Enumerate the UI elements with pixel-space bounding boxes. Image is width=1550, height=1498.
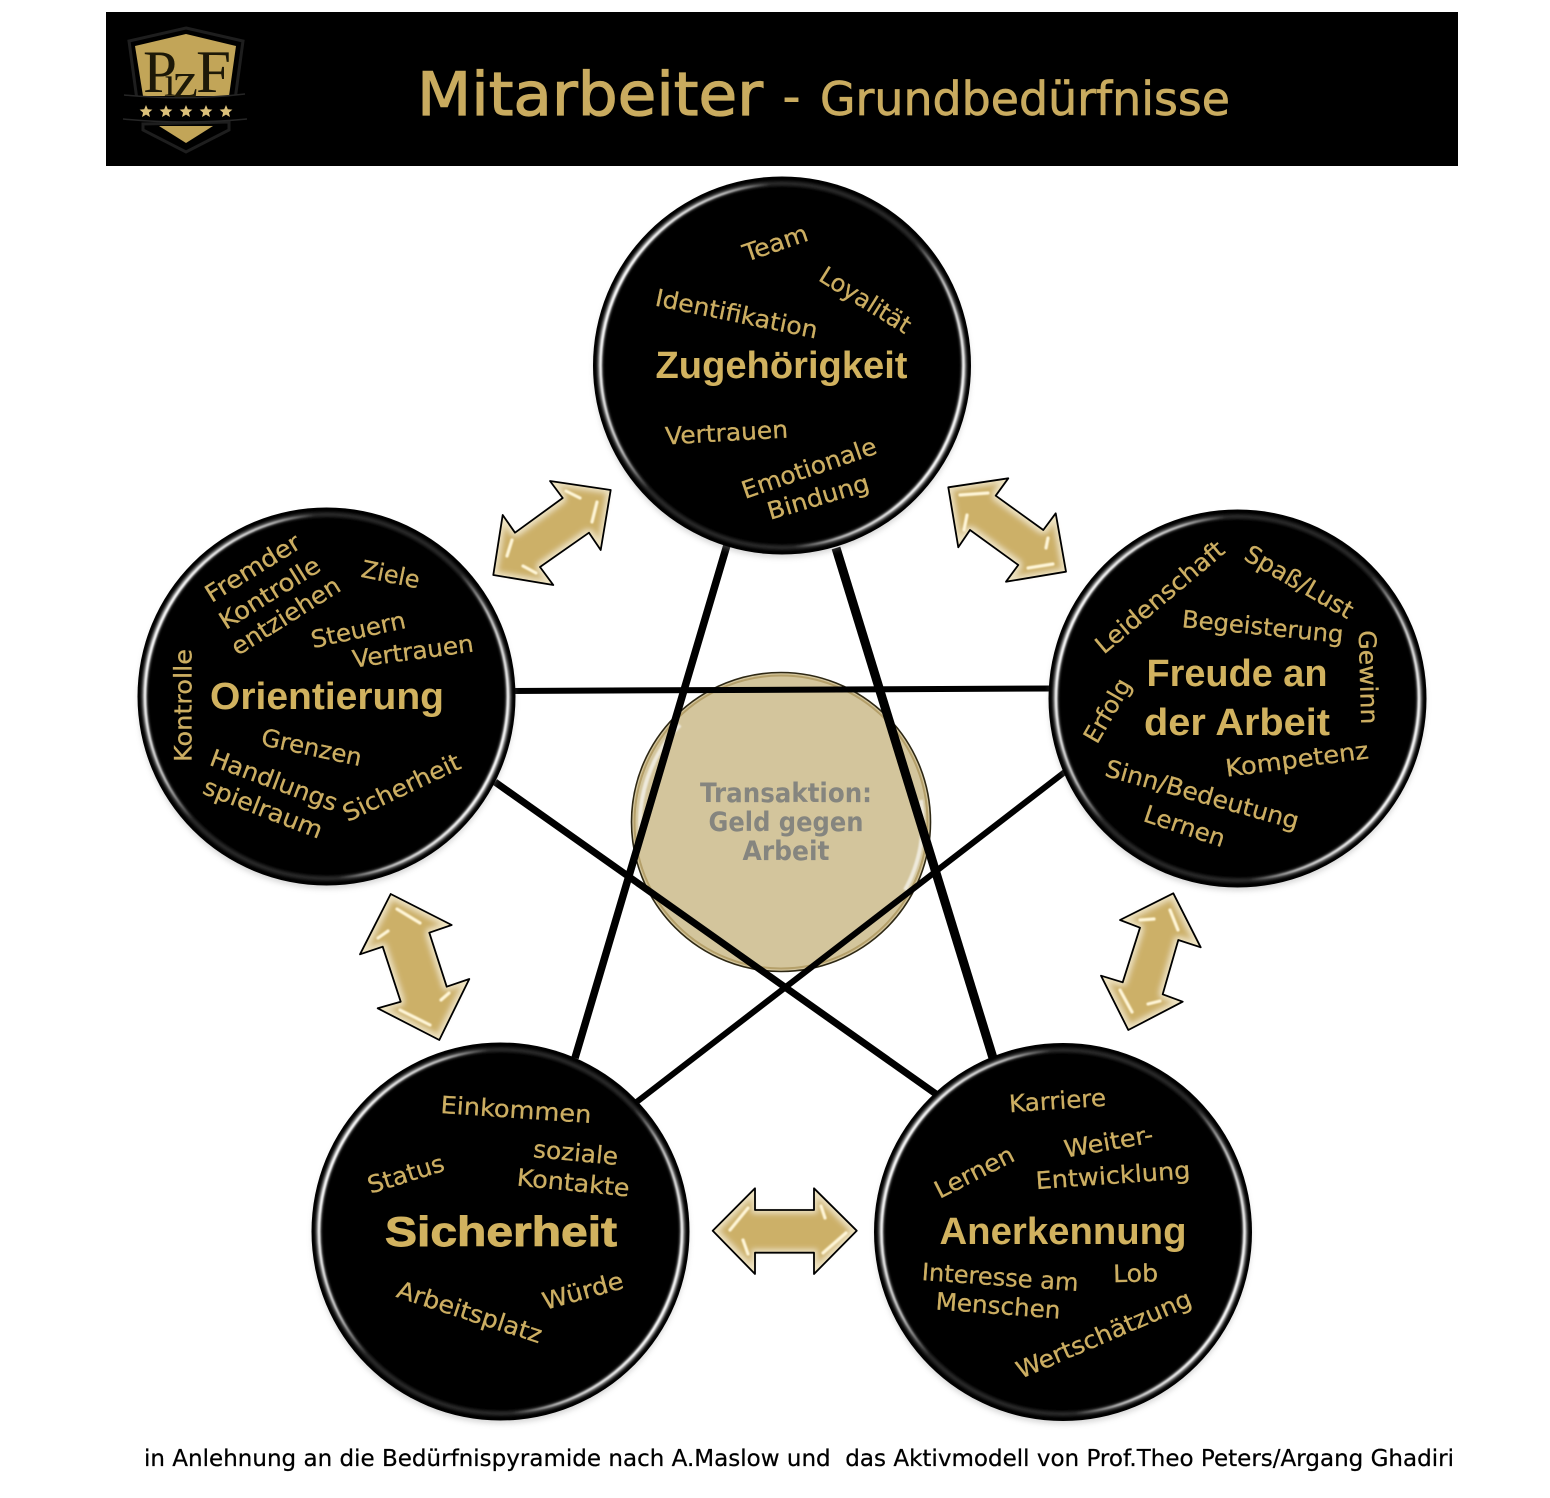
word: Entwicklung: Entwicklung: [1035, 1156, 1191, 1195]
word: Arbeitsplatz: Arbeitsplatz: [393, 1276, 546, 1349]
word: Wertschätzung: Wertschätzung: [1012, 1285, 1196, 1385]
pentagram connecting lines: [495, 545, 1068, 1104]
word: Erfolg: Erfolg: [1078, 673, 1137, 748]
word: Identifikation: Identifikation: [653, 284, 820, 344]
word: Vertrauen: Vertrauen: [664, 415, 789, 451]
word: Interesse am: Interesse am: [921, 1258, 1080, 1297]
word: Lob: Lob: [1113, 1259, 1158, 1288]
word: Vertrauen: Vertrauen: [351, 630, 475, 674]
panel: Sicherheit: [312, 1042, 690, 1424]
word: Lernen: Lernen: [930, 1140, 1019, 1204]
word: Begeisterung: Begeisterung: [1181, 605, 1345, 649]
word: Ziele: Ziele: [359, 555, 422, 594]
word: Kontrolle vertical: Kontrolle: [170, 649, 198, 762]
word: spielraum: spielraum: [199, 773, 327, 844]
arrow: Orientierung to Sicherheit: [360, 894, 469, 1040]
word: Kontakte: Kontakte: [516, 1164, 631, 1202]
word: entziehen: entziehen: [226, 571, 346, 661]
word: Team: Team: [738, 219, 812, 268]
center label: [700, 778, 872, 867]
word: Emotionale: Emotionale: [738, 432, 880, 505]
center label: Geld gegen: [708, 807, 864, 838]
title: [417, 60, 1230, 130]
icon: PzF shield logo: i: [164, 60, 176, 106]
arrow: Zugehörigkeit to Orientierung: [493, 481, 611, 585]
panel: Anerkennung: [874, 1043, 1252, 1424]
word: Karriere: Karriere: [1008, 1084, 1107, 1118]
center label: Arbeit: [742, 836, 830, 867]
arrow: Sicherheit to Anerkennung: [713, 1188, 857, 1274]
word: Sinn/Bedeutung: Sinn/Bedeutung: [1102, 754, 1302, 835]
word: Handlungs: Handlungs: [206, 744, 341, 817]
title: Grundbedürfnisse: [820, 72, 1230, 126]
panel: Freude an der Arbeit: [1048, 510, 1426, 890]
word: Loyalität: Loyalität: [814, 261, 916, 339]
title: Mitarbeiter: [417, 60, 763, 130]
word: Würde: Würde: [539, 1267, 627, 1316]
icon: PzF shield logo: [123, 28, 247, 152]
icon: PzF shield logo: P: [143, 39, 177, 105]
icon: PzF shield logo: z: [173, 52, 198, 108]
word: Fremder: Fremder: [200, 528, 306, 608]
heading: Zugehörigkeit: Zugehörigkeit: [656, 345, 908, 387]
heading: Freude an der Arbeit: Freude an: [1146, 653, 1328, 695]
word: Lernen: Lernen: [1140, 800, 1229, 853]
header banner: [106, 12, 1458, 166]
arrow: Zugehörigkeit to Freude an der Arbeit: [948, 478, 1066, 582]
word: Grenzen: Grenzen: [259, 723, 364, 772]
center label: Transaktion:: [700, 778, 872, 809]
arrow: Freude an der Arbeit to Anerkennung: [1101, 893, 1201, 1030]
word: Gewinn: Gewinn: [1353, 630, 1383, 725]
heading: Sicherheit: Sicherheit: [385, 1208, 617, 1255]
panel: Zugehörigkeit: [593, 176, 971, 558]
heading: Anerkennung: Anerkennung: [940, 1211, 1186, 1253]
word: Sicherheit: Sicherheit: [338, 748, 465, 828]
icon: PzF shield logo: F: [196, 39, 231, 105]
word: Steuern: Steuern: [308, 606, 408, 654]
word: Kompetenz: Kompetenz: [1224, 736, 1370, 783]
heading: Freude an der Arbeit: der Arbeit: [1144, 702, 1330, 744]
word: Bindung: Bindung: [764, 469, 873, 526]
panel: Orientierung: [138, 508, 516, 888]
heading: Orientierung: Orientierung: [210, 676, 444, 718]
heading: Freude an der Arbeit: [1144, 653, 1330, 744]
word: Spaß/Lust: Spaß/Lust: [1240, 540, 1358, 624]
word: Menschen: Menschen: [935, 1287, 1061, 1325]
footer citation: in Anlehnung an die Bedürfnispyramide nach A.Maslow und das Aktivmodell von Prof.Theo Peters/Argang Ghadiri: [144, 1446, 1454, 1472]
word: Leidenschaft: Leidenschaft: [1090, 535, 1230, 660]
word: Einkommen: Einkommen: [440, 1091, 592, 1129]
word: Weiter-: Weiter-: [1062, 1121, 1155, 1164]
center circle: Transaktion: [632, 672, 930, 972]
word: Status: Status: [364, 1149, 448, 1199]
word: soziale: soziale: [532, 1135, 619, 1171]
title: -: [782, 64, 801, 129]
word: Kontrolle: Kontrolle: [214, 551, 326, 635]
